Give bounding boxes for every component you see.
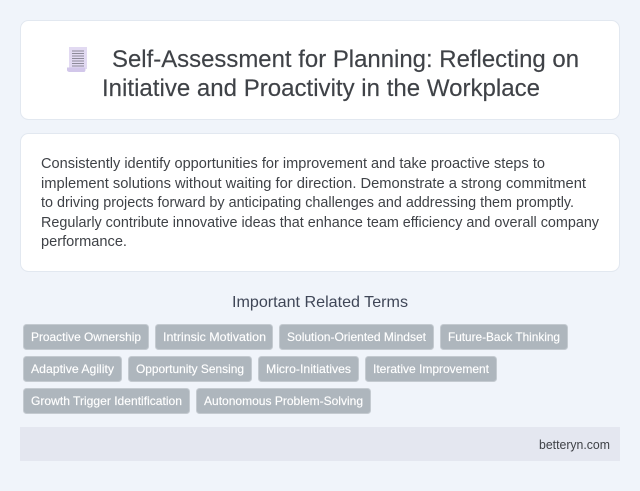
text block: description [41, 156, 600, 250]
tag: Adaptive Agility: Adaptive Agility [31, 362, 114, 376]
tag: Future-Back Thinking [440, 324, 568, 350]
text block: description: Consistently identify opportunities for improvement and take proactive steps to [41, 156, 545, 172]
tag: Micro-Initiatives: Micro-Initiatives [266, 362, 351, 376]
tag: Growth Trigger Identification [24, 388, 190, 414]
tag: Opportunity Sensing [128, 356, 252, 382]
text block: description: implement solutions without waiting for direction. Demonstrate a strong commitment [41, 176, 586, 192]
footer: source: betteryn.com [539, 438, 610, 452]
tag: Solution-Oriented Mindset: Solution-Oriented Mindset [287, 330, 427, 344]
tag: Autonomous Problem-Solving [196, 388, 370, 414]
tag: Adaptive Agility [24, 356, 122, 382]
tags: related terms [24, 324, 568, 414]
tag: Intrinsic Motivation: Intrinsic Motivation [163, 330, 266, 344]
panel: description [20, 134, 620, 272]
text block: description: to driving projects forward by anticipating challenges and addressing them promptly. [41, 195, 574, 211]
tag: Iterative Improvement: Iterative Improvement [373, 362, 490, 376]
icon: scroll document [67, 47, 87, 72]
tag: Intrinsic Motivation [156, 324, 272, 350]
heading: title: Self-Assessment for Planning: Reflecting on [112, 46, 579, 73]
text block: description: Regularly contribute innovative ideas that enhance team efficiency and overall company [41, 215, 600, 231]
panel: title card [20, 20, 620, 120]
heading: important related terms: Important Related Terms [232, 294, 408, 311]
tag: Opportunity Sensing: Opportunity Sensing [136, 362, 244, 376]
tag: Micro-Initiatives [258, 356, 358, 382]
tag: Autonomous Problem-Solving: Autonomous Problem-Solving [204, 394, 363, 408]
tag: Proactive Ownership: Proactive Ownership [31, 330, 141, 344]
tag: Solution-Oriented Mindset [280, 324, 434, 350]
tag: Growth Trigger Identification: Growth Trigger Identification [31, 394, 182, 408]
tag: Iterative Improvement [366, 356, 496, 382]
tag: Proactive Ownership [24, 324, 148, 350]
text block: description: performance. [41, 234, 127, 250]
footer bar [20, 427, 620, 461]
tag: Future-Back Thinking: Future-Back Thinking [448, 330, 560, 344]
heading: title [102, 46, 579, 102]
heading: title: Initiative and Proactivity in the Workplace [102, 75, 540, 102]
